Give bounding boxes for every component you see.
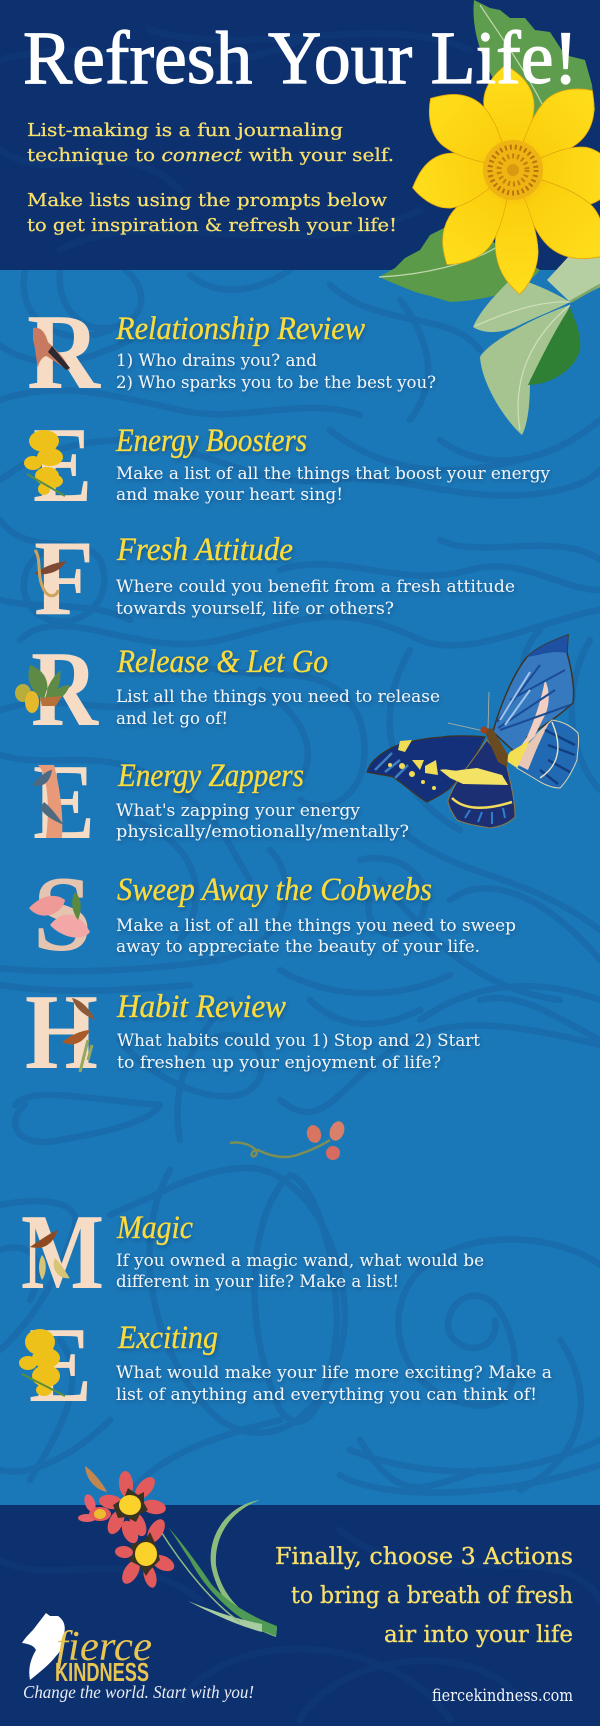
forewing left bbox=[367, 736, 485, 802]
intro text bbox=[27, 120, 397, 236]
list item: E Energy Boosters bbox=[24, 406, 551, 525]
body: List all the things you need to release bbox=[116, 687, 440, 706]
letter S with pink flowers: S bbox=[33, 855, 92, 974]
body: physically/emotionally/mentally? bbox=[116, 822, 409, 841]
list item: E Exciting bbox=[19, 1306, 552, 1425]
flower 2 bbox=[78, 1493, 111, 1522]
body: 2) Who sparks you to be the best you? bbox=[116, 373, 436, 392]
hindwing right bbox=[517, 720, 579, 788]
leaf: pale middle bbox=[473, 277, 570, 332]
body bbox=[116, 351, 436, 392]
heading: Energy Boosters bbox=[115, 423, 307, 459]
heading: Energy Zappers bbox=[117, 758, 304, 794]
leaf: upper right pale bbox=[547, 255, 600, 302]
list item: F Fresh Attitude bbox=[34, 519, 515, 638]
flower 3 bbox=[115, 1516, 177, 1589]
letter R with bird: R bbox=[27, 293, 101, 412]
flower 1 bbox=[98, 1470, 167, 1539]
heading: Magic bbox=[116, 1210, 193, 1246]
letter M with bird: M bbox=[21, 1193, 104, 1312]
body: If you owned a magic wand, what would be bbox=[116, 1251, 484, 1270]
list item: R Relationship Review bbox=[27, 293, 436, 412]
heading: Exciting bbox=[117, 1320, 218, 1356]
letter F with bird: F bbox=[34, 519, 94, 638]
body bbox=[117, 1031, 480, 1072]
body: What would make your life more exciting? Make a bbox=[116, 1363, 552, 1382]
list item: R Release and Let Go bbox=[15, 630, 440, 749]
body: and let go of! bbox=[116, 709, 228, 728]
body bbox=[116, 464, 551, 504]
logo: Fierce Kindness bbox=[22, 1613, 254, 1702]
illustration: yellow flower with leaves bbox=[379, 0, 600, 435]
body: list of anything and everything you can think of! bbox=[116, 1385, 537, 1404]
bud bbox=[85, 1466, 107, 1492]
intro text: Make lists using the prompts below bbox=[27, 190, 388, 211]
body: and make your heart sing! bbox=[116, 485, 343, 504]
body: What habits could you 1) Stop and 2) Start bbox=[117, 1031, 480, 1050]
icon: lion silhouette bbox=[22, 1613, 65, 1680]
petals bbox=[408, 63, 600, 295]
leaf: top bbox=[473, 0, 595, 155]
intro text: List-making is a fun journaling bbox=[27, 120, 343, 141]
website: fiercekindness.com bbox=[432, 1686, 573, 1705]
body: to freshen up your enjoyment of life? bbox=[117, 1053, 441, 1072]
body bbox=[116, 1363, 552, 1404]
intro text: technique to connect with your self. bbox=[27, 145, 394, 166]
illustration: sprig with buds bbox=[230, 1119, 347, 1160]
letter E with yellow blossoms: E bbox=[33, 406, 92, 525]
heading: Fresh Attitude bbox=[116, 532, 293, 568]
body bbox=[116, 687, 440, 728]
body: Make a list of all the things that boost your energy bbox=[116, 464, 551, 483]
panel: header bbox=[0, 0, 600, 270]
illustration: red flowers with stems bbox=[78, 1466, 277, 1637]
closing message bbox=[275, 1544, 573, 1648]
leaf: dark bbox=[528, 307, 580, 385]
list item: M Magic bbox=[21, 1193, 484, 1312]
hindwing left bbox=[448, 740, 515, 828]
closing message: to bring a breath of fresh bbox=[291, 1583, 573, 1609]
body: Where could you benefit from a fresh attitude bbox=[116, 577, 515, 596]
flower centre bbox=[483, 140, 543, 200]
body bbox=[484, 728, 508, 767]
list item: H Habit Review bbox=[25, 973, 480, 1092]
letter R with lemons: R bbox=[31, 630, 99, 749]
body: 1) Who drains you? and bbox=[116, 351, 317, 370]
body bbox=[116, 916, 516, 956]
list item: E Energy Zappers bbox=[32, 743, 409, 862]
logo word: KINDNESS: KINDNESS bbox=[55, 1657, 149, 1687]
heading: Habit Review bbox=[116, 989, 286, 1025]
closing message: Finally, choose 3 Actions bbox=[275, 1544, 573, 1570]
intro text: to get inspiration & refresh your life! bbox=[27, 215, 397, 236]
body: different in your life? Make a list! bbox=[116, 1272, 399, 1291]
body: What's zapping your energy bbox=[116, 801, 361, 820]
heading: Relationship Review bbox=[115, 311, 365, 347]
heading: Release & Let Go bbox=[116, 644, 328, 680]
body bbox=[116, 1251, 484, 1291]
panel: footer bbox=[0, 1505, 600, 1726]
forewing right bbox=[493, 635, 574, 757]
body: away to appreciate the beauty of your life. bbox=[116, 937, 480, 956]
heading: Sweep Away the Cobwebs bbox=[117, 872, 432, 908]
closing message: air into your life bbox=[384, 1622, 573, 1648]
body: Make a list of all the things you need to sweep bbox=[116, 916, 516, 935]
leaf: lower left bbox=[379, 225, 540, 302]
tagline: Change the world. Start with you! bbox=[23, 1682, 254, 1702]
leaf: pale lower bbox=[480, 305, 570, 435]
yellow band bbox=[440, 768, 508, 785]
body bbox=[116, 801, 409, 841]
letter H with birds: H bbox=[25, 973, 98, 1092]
illustration: butterfly bbox=[367, 635, 579, 828]
grass leaves bbox=[160, 1500, 277, 1637]
body: towards yourself, life or others? bbox=[116, 599, 394, 618]
title: Refresh Your Life! bbox=[23, 17, 578, 100]
list item: S Sweep Away the Cobwebs bbox=[29, 855, 516, 974]
letter E with birds: E bbox=[33, 743, 95, 862]
logo word: fierce: fierce bbox=[56, 1624, 152, 1670]
body bbox=[116, 577, 515, 618]
letter E with yellow blossoms: E bbox=[29, 1306, 92, 1425]
